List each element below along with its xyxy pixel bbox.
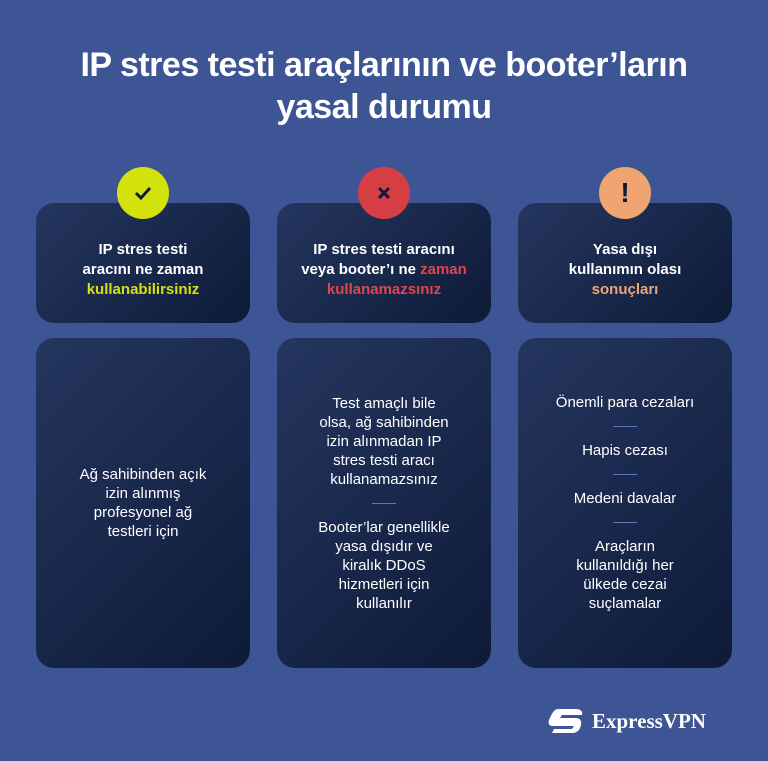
body card 3: Hapis cezası — [582, 442, 668, 459]
header card 1: IP stres testi — [99, 241, 187, 258]
body card 3: Önemli para cezaları — [556, 394, 694, 411]
logo: ExpressVPN: ExpressVPN — [592, 708, 706, 732]
body card 2: izin alınmadan IP — [326, 432, 442, 450]
icon: check — [117, 167, 169, 219]
header card 3: kullanımın olası — [569, 261, 681, 278]
body card 1: izin alınmış — [105, 485, 180, 502]
body card 1: profesyonel ağ — [94, 504, 192, 521]
header card 2 — [277, 203, 491, 323]
body card 2: kullanamazsınız — [330, 470, 438, 488]
body card 2: stres testi aracı — [333, 452, 435, 468]
body card 2: Test amaçlı bile — [332, 394, 436, 412]
body card 1 — [36, 338, 250, 668]
icon: cross — [358, 167, 410, 219]
body card 2: olsa, ağ sahibinden — [319, 414, 449, 430]
body card 3: kullanıldığı her — [576, 557, 674, 574]
body card 2: kiralık DDoS — [342, 556, 426, 574]
icon: exclamation — [599, 167, 651, 219]
title: yasal durumu — [276, 88, 492, 126]
header card 1 — [36, 203, 250, 323]
body card 2 — [277, 338, 491, 668]
body card 2: yasa dışıdır ve — [335, 538, 433, 554]
body card 2: hizmetleri için — [339, 576, 429, 592]
title: IP stres testi araçlarının ve booter’ların — [80, 46, 688, 84]
body card 3 — [518, 338, 732, 668]
header card 1: aracını ne zaman — [83, 261, 203, 278]
body card 3: Medeni davalar — [574, 490, 676, 507]
icon: exclamation: ! — [620, 177, 630, 208]
header card 1: kullanabilirsiniz — [87, 281, 199, 298]
body card 1: Ağ sahibinden açık — [80, 466, 206, 483]
header card 3: Yasa dışı — [593, 241, 657, 258]
body card 2: Booter’lar genellikle — [318, 518, 450, 536]
body card 2: kullanılır — [356, 594, 412, 612]
header card 3 — [518, 203, 732, 323]
body card 3: Araçların — [595, 538, 655, 555]
header card 2: kullanamazsınız — [327, 281, 441, 298]
title — [80, 46, 688, 126]
header card 3: sonuçları — [592, 281, 658, 298]
body card 3: ülkede cezai — [583, 576, 667, 593]
header card 2: IP stres testi aracını — [313, 241, 455, 258]
body card 1: testleri için — [108, 523, 178, 540]
body card 3: suçlamalar — [589, 595, 661, 612]
header card 2: veya booter’ı ne zaman — [301, 261, 467, 278]
